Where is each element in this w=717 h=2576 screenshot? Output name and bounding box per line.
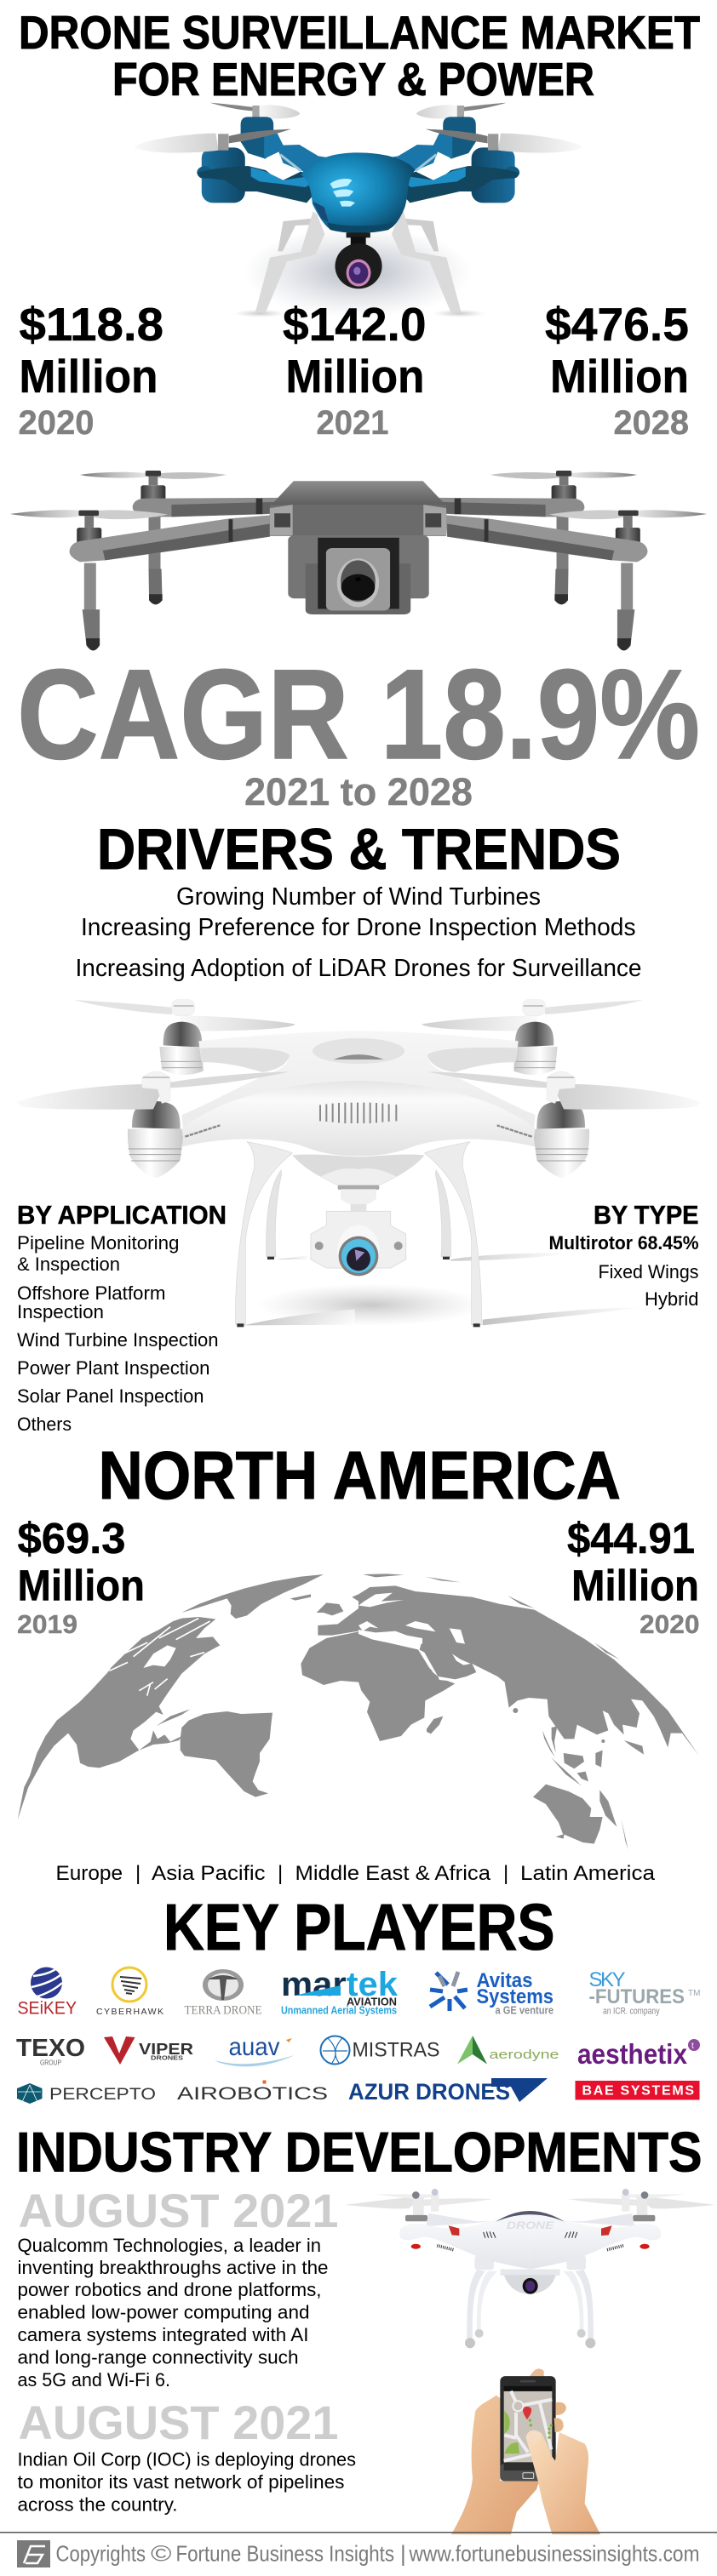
footer [17, 2540, 700, 2567]
stat: 2028 market size: $476.5 [545, 298, 689, 351]
logo: auav: auav [228, 2033, 279, 2061]
type list [548, 1232, 698, 1310]
logo: Aerodyne [457, 2036, 559, 2065]
logo: Viper Drones: VIPER [139, 2041, 193, 2058]
logo: BAE Systems: BAE SYSTEMS [582, 2083, 694, 2099]
footer: © [151, 2541, 172, 2567]
regions list: Latin America [520, 1862, 656, 1885]
title [19, 6, 700, 106]
logo: Cyberhawk: CYBERHAWK [96, 2007, 163, 2017]
stat: 2021 market size: 2021 [317, 404, 388, 442]
application list: Wind Turbine Inspection [17, 1329, 218, 1351]
stat: 2021 market size [283, 298, 426, 442]
stat: 2020 north america [567, 1514, 700, 1639]
stat: 2028 market size [545, 298, 689, 442]
regions list: | [135, 1862, 141, 1885]
panel: by type [548, 1200, 698, 1310]
logo: Aesthetix: aesthetix [577, 2038, 688, 2070]
development 2 text: Indian Oil Corp (IOC) is deploying drones [17, 2449, 356, 2470]
stat: 2020 market size [19, 298, 163, 442]
footer: Copyrights [56, 2541, 146, 2567]
logo: Azur Drones: AZUR DRONES [348, 2079, 510, 2105]
application list: Others [17, 1414, 72, 1435]
development 2 text [17, 2449, 356, 2516]
development 2 date: AUGUST 2021 [19, 2396, 339, 2449]
regions list: Middle East & Africa [295, 1862, 491, 1885]
logo: auav [215, 2033, 295, 2066]
logo: Avitas Systems: Avitas [477, 1969, 533, 1992]
logo: Martek Aviation: Unmanned Aerial Systems [281, 2003, 397, 2017]
logo: Texo Group: GROUP [40, 2059, 61, 2066]
stat: 2021 market size: Million [286, 350, 424, 403]
stat: 2020 market size: $118.8 [19, 298, 163, 351]
illustration: grey drone [10, 471, 707, 650]
illustration: hand holding phone [451, 2368, 600, 2534]
development 2 text: across the country. [17, 2493, 177, 2516]
application list: & Inspection [17, 1254, 120, 1275]
development 1 text: Qualcomm Technologies, a leader in [17, 2235, 321, 2256]
illustration: blue drone [134, 103, 583, 317]
logo: Texo Group: TEXO [16, 2035, 85, 2062]
stat: 2020 market size: 2020 [19, 404, 94, 442]
logo: BAE Systems [576, 2081, 700, 2100]
logo: Mistras [320, 2036, 439, 2065]
logo: Sky Futures: an ICR. company [603, 2007, 660, 2017]
stat: 2028 market size: 2028 [613, 404, 689, 442]
regions list: Asia Pacific [152, 1862, 266, 1885]
logo: Terra Drone [184, 1969, 262, 2017]
regions list: | [278, 1862, 283, 1885]
footer: Fortune Business Insights [175, 2541, 394, 2567]
logo: Aesthetix: t [691, 2042, 694, 2051]
type list: Fixed Wings [598, 1261, 698, 1282]
logo: Martek Aviation: AVIATION [347, 1995, 397, 2008]
application list: Power Plant Inspection [17, 1357, 209, 1379]
stat: 2019 north america [17, 1514, 145, 1639]
heading: north america: NORTH AMERICA [99, 1437, 621, 1513]
stat: 2019 north america: $69.3 [17, 1514, 126, 1562]
text block: drivers list [75, 883, 642, 982]
heading: BY APPLICATION [17, 1200, 227, 1230]
logo: Sky Futures: -FUTURES [589, 1985, 685, 2008]
logo: Mistras: MISTRAS [353, 2039, 439, 2061]
footer: | [400, 2541, 406, 2567]
development 2 text: to monitor its vast network of pipelines [17, 2471, 344, 2493]
logo: Avitas Systems: a GE venture [496, 2003, 554, 2017]
logo: Aerodyne: aerodyne [489, 2048, 559, 2062]
text block: drivers list: Growing Number of Wind Turbines [176, 883, 541, 911]
illustration: small white drone: DRONE [507, 2219, 555, 2231]
development 1 text: power robotics and drone platforms, [17, 2279, 322, 2300]
text block: drivers list: Increasing Adoption of LiDAR Drones for Surveillance [75, 955, 642, 982]
heading: drivers and trends: DRIVERS & TRENDS [97, 817, 621, 882]
logo: Sky Futures: TM [688, 1989, 700, 1998]
regions list: | [503, 1862, 508, 1885]
logo: Percepto: PERCEPTO [49, 2086, 156, 2104]
stat: 2019 north america: 2019 [17, 1609, 77, 1639]
application list: Offshore Platform [17, 1282, 165, 1304]
development 1 text: inventing breakthroughs active in the [17, 2257, 329, 2278]
heading: key players: KEY PLAYERS [163, 1891, 555, 1964]
logo: Viper Drones [104, 2036, 193, 2065]
stat: 2020 north america: 2020 [640, 1609, 700, 1639]
heading: BY TYPE [594, 1200, 698, 1230]
illustration: small white drone [345, 2189, 715, 2348]
text block: drivers list: Increasing Preference for Drone Inspection Methods [81, 914, 635, 941]
CAGR period: 2021 to 2028 [244, 770, 473, 814]
stat: 2020 north america: $44.91 [567, 1514, 695, 1562]
logo: Sky Futures: SKY [589, 1968, 625, 1991]
development 1 text: and long-range connectivity such [17, 2347, 298, 2368]
application list: Pipeline Monitoring [17, 1232, 179, 1254]
logo: Seikey: SEiKEY [17, 1998, 77, 2019]
panel: by application [17, 1200, 227, 1435]
application list: Solar Panel Inspection [17, 1385, 204, 1407]
development 1 text: as 5G and Wi-Fi 6. [17, 2369, 170, 2390]
logo: Percepto [17, 2083, 156, 2104]
stat: 2020 north america: Million [571, 1561, 699, 1610]
logo: Avitas Systems: Systems [477, 1985, 554, 2008]
logo: Martek Aviation: martek [281, 1966, 399, 2003]
development 1 text [17, 2235, 329, 2390]
logo: Avitas Systems [430, 1969, 554, 2017]
stat: 2020 market size: Million [19, 350, 158, 403]
logo: Terra Drone: TERRA DRONE [184, 2003, 262, 2017]
development 1 text: camera systems integrated with AI [17, 2324, 308, 2345]
logo: Airobotics: AIROBOTICS [177, 2084, 328, 2104]
logo: Fortune Business Insights [17, 2540, 50, 2567]
logo: Airobotics [177, 2080, 328, 2104]
stat: 2028 market size: Million [550, 350, 689, 403]
logo: Sky Futures [589, 1968, 700, 2017]
stat: 2021 market size: $142.0 [283, 298, 426, 351]
application list: Inspection [17, 1301, 104, 1322]
illustration: white drone [16, 1000, 701, 1327]
application list [17, 1232, 218, 1435]
development 1 date: AUGUST 2021 [19, 2184, 339, 2237]
type list: Multirotor 68.45% [548, 1232, 698, 1254]
logo: Cyberhawk [96, 1968, 163, 2017]
world map [18, 1574, 699, 1849]
logo: Viper Drones: DRONES [151, 2056, 183, 2061]
title: FOR ENERGY & POWER [112, 53, 594, 106]
regions list [56, 1862, 656, 1885]
type list: Hybrid [645, 1288, 698, 1310]
development 1 text: enabled low-power computing and [17, 2301, 310, 2323]
logos: key players [16, 1966, 700, 2105]
stat: 2019 north america: Million [17, 1561, 145, 1610]
logo: Seikey [17, 1968, 77, 2019]
regions list: Europe [56, 1862, 123, 1885]
